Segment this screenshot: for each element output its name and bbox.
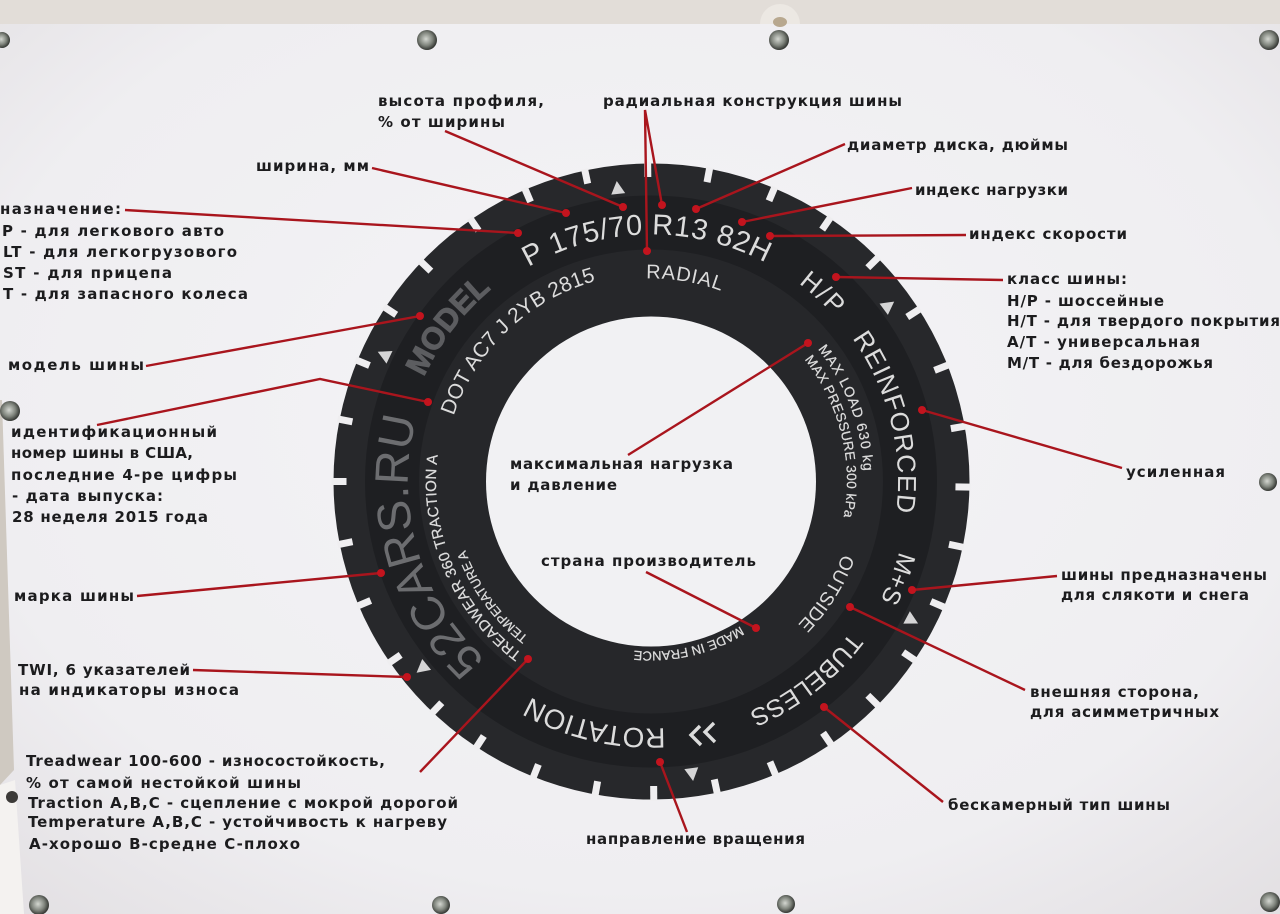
label: UTQG treadwear traction temperature [26,655,532,853]
brand 52CARS.RU: 52CARS.RU [375,416,481,680]
label: radial construction: радиальная конструкция шины [603,92,902,110]
M+S marking: M+S [882,554,916,604]
label: mud and snow: шины предназначены [1061,566,1267,584]
label: rotation direction: направление вращения [586,830,805,848]
background: dark bolt at left board edge [6,791,18,803]
label: outer side: для асимметричных [1030,703,1219,721]
label: rim diameter: диаметр диска, дюймы [847,136,1068,154]
tire centre hole [486,316,816,646]
OUTSIDE marking: OUTSIDE [798,556,853,633]
label: speed index: индекс скорости [969,225,1127,243]
label: DOT identification number: 28 неделя 2015 года [12,508,208,526]
label: brand: марка шины [14,587,134,605]
tire wheel diagram [334,164,970,800]
label: rim diameter [692,136,1068,213]
label: purpose: LT - для легкогрузового [3,243,237,261]
label: profile height: высота профиля, [378,92,544,110]
label: width: ширина, мм [256,157,369,175]
label: purpose: T - для запасного колеса [3,285,248,303]
label: mud and snow [908,566,1267,604]
label: width [256,157,570,217]
label: tire model [8,312,424,374]
label: profile height: % от ширины [378,113,505,131]
label: DOT identification number: - дата выпуска: [12,487,163,505]
label: tubeless [820,703,1170,814]
label: UTQG treadwear traction temperature: Temperature A,B,C - устойчивость к нагреву [28,813,447,831]
tread notches [332,162,971,801]
label: load index [738,181,1068,226]
label: purpose: ST - для прицепа [3,264,172,282]
tire class H/P: H/P [800,270,844,308]
label: UTQG treadwear traction temperature: % от самой нестойкой шины [26,774,301,792]
label: TWI [18,661,411,699]
label: DOT identification number: идентификационный [11,423,217,441]
MADE IN FRANCE marking: MADE IN FRANCE [634,626,744,661]
tire inner sidewall [419,250,883,714]
label: TWI: на индикаторы износа [19,681,239,699]
label: profile height [378,92,627,211]
label: DOT identification number: номер шины в США, [11,444,193,462]
label: tire class: A/T - универсальная [1007,333,1200,351]
label: country of origin [541,552,760,632]
label: purpose: назначение: [0,200,121,218]
label: reinforced [918,406,1225,481]
label: tire class: H/P - шоссейные [1007,292,1164,310]
label: purpose [0,200,522,303]
label: tire class [832,270,1280,372]
DOT identification number: DOT AC7 J 2YB 2815 [440,268,594,414]
label: DOT identification number: последние 4-ре цифры [11,466,237,484]
rotation direction chevrons [691,723,715,745]
label: speed index [766,225,1127,243]
treadwear and traction marking: TREADWEAR 360 TRACTION A [425,454,520,662]
label: brand [14,569,385,605]
label: radial construction [603,92,902,255]
label: tubeless: бескамерный тип шины [948,796,1170,814]
label: UTQG treadwear traction temperature: Treadwear 100-600 - износостойкость, [26,752,385,770]
TUBELESS marking: TUBELESS [751,637,864,726]
label: rotation direction [586,758,805,848]
size marking P 175/70 R13 82H: P 175/70 R13 82H [521,214,772,266]
label: tire class: класс шины: [1007,270,1127,288]
label: outer side [846,603,1219,721]
label: mud and snow: для слякоти и снега [1061,586,1249,604]
background: wall strip above the board [0,0,1280,24]
REINFORCED marking: REINFORCED [854,330,916,512]
wear indicator triangles [375,180,921,782]
tire shoulder ring [365,196,937,768]
tire outer tread [334,164,970,800]
label: reinforced: усиленная [1126,463,1225,481]
MODEL marking: MODEL [405,280,491,376]
label: max load and pressure [510,339,812,494]
label: DOT identification number [11,379,432,526]
label: UTQG treadwear traction temperature: A-хорошо B-средне C-плохо [29,835,300,853]
max pressure marking: MAX PRESSURE 300 kPa [805,354,857,518]
label: tire class: M/T - для бездорожья [1007,354,1213,372]
label: tire class: H/T - для твердого покрытия [1007,312,1280,330]
label: country of origin: страна производитель [541,552,756,570]
ROTATION marking: ROTATION [523,698,664,748]
background: white fixture at lower left [0,780,24,914]
label: TWI: TWI, 6 указателей [18,661,190,679]
mounting clip at top edge [760,4,800,27]
label: UTQG treadwear traction temperature: Traction A,B,C - сцепление с мокрой дорогой [28,794,458,812]
label: tire model: модель шины [8,356,144,374]
temperature marking: TEMPERATURE A [458,550,526,644]
label: max load and pressure: и давление [510,476,617,494]
label: purpose: P - для легкового авто [2,222,224,240]
max load marking: MAX LOAD 630 kg [818,344,873,470]
RADIAL marking: RADIAL [648,264,721,291]
label: outer side: внешняя сторона, [1030,683,1199,701]
label: max load and pressure: максимальная нагрузка [510,455,733,473]
background: wall strip left of the board [0,400,14,785]
label: load index: индекс нагрузки [915,181,1068,199]
